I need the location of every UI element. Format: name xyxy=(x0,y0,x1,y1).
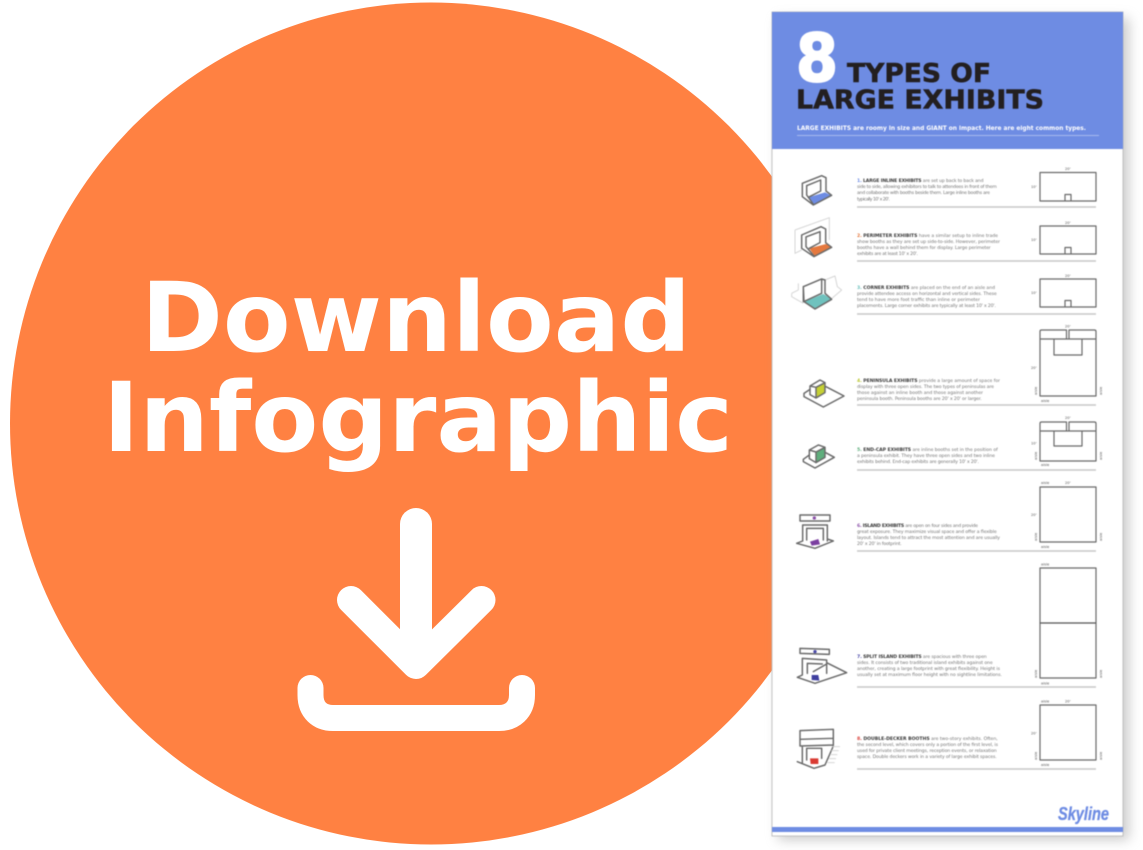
infographic poster xyxy=(772,12,1123,836)
exhibit type 7: split island xyxy=(797,562,1103,687)
icon: large inline booth xyxy=(802,176,832,205)
exhibit type 1: large inline xyxy=(802,167,1096,207)
exhibit type 5: end-cap xyxy=(803,416,1103,470)
icon: perimeter booth xyxy=(795,218,832,257)
exhibit type 5: end-cap: a peninsula exhibit. They have three open sides and two inline xyxy=(857,453,995,459)
floor plan: corner: 10' xyxy=(1031,291,1037,295)
text: double decker: 8. DOUBLE-DECKER BOOTHS are two-story exhibits. Often, xyxy=(857,736,998,742)
exhibit type 6: island: layout. Islands tend to attract the most attention and are usually xyxy=(857,535,1000,541)
exhibit type 4: peninsula: peninsula booth. Peninsula booths are 20' x 20' or larger. xyxy=(857,396,982,402)
floor plan: peninsula: aisle xyxy=(1034,386,1038,395)
floor plan: double decker: aisle xyxy=(1034,751,1038,760)
floor plan: end-cap xyxy=(1031,416,1103,467)
floor plan: split island: aisle xyxy=(1034,669,1038,678)
exhibit type 8: double decker: space. Double deckers work in a variety of large exhibit spaces. xyxy=(857,754,997,760)
exhibit type 2: perimeter: booths have a wall behind them for display. Large perimeter xyxy=(857,245,991,251)
floor plan: end-cap: 20' xyxy=(1065,416,1071,420)
floor plan: end-cap: 10' xyxy=(1031,442,1037,446)
exhibit type 6: island xyxy=(797,481,1103,551)
exhibit type 1: large inline: typically 10' x 20'. xyxy=(857,196,890,202)
poster header xyxy=(772,12,1123,149)
icon: corner booth xyxy=(792,276,842,309)
icon: split island booth xyxy=(797,648,847,683)
floor plan: island: 20' xyxy=(1065,481,1071,485)
exhibit type 2: perimeter xyxy=(795,218,1096,261)
floor plan: perimeter: 10' xyxy=(1031,238,1037,242)
poster shadow xyxy=(778,18,1129,840)
floor plan: island: aisle xyxy=(1034,532,1038,541)
floor plan: peninsula: aisle xyxy=(1099,386,1103,395)
exhibit type 7: split island: another, creating a large footprint with great flexibility. Height is xyxy=(857,666,1001,672)
exhibit type 1: large inline: side to side, allowing exhibitors to talk to attendees in front of them xyxy=(857,184,997,190)
floor plan: peninsula: aisle xyxy=(1041,399,1050,403)
logo: Skyline: Skyline xyxy=(1058,803,1109,824)
floor plan: split island: aisle xyxy=(1099,669,1103,678)
poster footer band xyxy=(772,827,1123,832)
exhibit type 2: perimeter: show booths as they are set up side-to-side. However, perimeter xyxy=(857,239,1000,245)
exhibit type 3: corner: tend to have more foot traffic than inline or perimeter xyxy=(857,297,980,303)
floor plan: end-cap: aisle xyxy=(1041,463,1050,467)
exhibit type 3: corner: provide attendee access on horizontal and vertical sides. These xyxy=(857,291,997,297)
floor plan: end-cap: aisle xyxy=(1099,451,1103,460)
text: large inline: 1. LARGE INLINE EXHIBITS are set up back to back and xyxy=(857,178,984,184)
floor plan: island: aisle xyxy=(1041,481,1050,485)
floor plan: large inline: 20' xyxy=(1065,167,1071,171)
floor plan: large inline xyxy=(1031,167,1096,201)
text: perimeter: 2. PERIMETER EXHIBITS have a similar setup to inline trade xyxy=(857,233,998,239)
exhibit type 7: split island: sides. It consists of two traditional island exhibits against one xyxy=(857,660,993,666)
exhibit type 1: large inline: and collaborate with booths beside them. Large inline booths are xyxy=(857,190,990,196)
exhibit type 8: double decker xyxy=(797,700,1103,769)
exhibit type 6: island: 20' x 20' in footprint. xyxy=(857,541,902,547)
exhibit type 4: peninsula xyxy=(804,324,1103,407)
poster title: TYPES OF xyxy=(847,59,991,89)
icon: end-cap booth xyxy=(803,445,834,468)
floor plan: corner: 20' xyxy=(1065,274,1071,278)
floor plan: island: aisle xyxy=(1099,532,1103,541)
floor plan: double decker: aisle xyxy=(1041,700,1050,704)
floor plan: perimeter: 20' xyxy=(1065,221,1071,225)
floor plan: peninsula xyxy=(1031,324,1103,403)
exhibit type 7: split island: usually set at maximum floor height with no sightline limitations. xyxy=(857,672,1002,678)
text: peninsula: 4. PENINSULA EXHIBITS provide a large amount of space for xyxy=(857,378,1000,384)
floor plan: island: aisle xyxy=(1041,545,1050,549)
exhibit type 3: corner xyxy=(792,274,1096,314)
poster title xyxy=(796,20,1044,116)
floor plan: perimeter xyxy=(1031,221,1096,254)
floor plan: double decker: 20' xyxy=(1065,700,1071,704)
floor plan: island xyxy=(1031,481,1103,549)
floor plan: split island xyxy=(1034,562,1103,686)
floor plan: double decker: 20' xyxy=(1031,732,1037,736)
text: corner: 3. CORNER EXHIBITS are placed on the end of an aisle and xyxy=(857,285,995,291)
exhibit type 5: end-cap: exhibits behind. End-cap exhibits are generally 10' x 20'. xyxy=(857,459,979,465)
icon: island booth xyxy=(797,515,833,548)
text: end-cap: 5. END-CAP EXHIBITS are inline booths set in the position of xyxy=(857,447,998,453)
floor plan: split island: aisle xyxy=(1041,682,1050,686)
floor plan: end-cap: aisle xyxy=(1034,451,1038,460)
exhibit type 8: double decker: used for private client meetings, reception events, or relaxation xyxy=(857,748,997,754)
floor plan: double decker: aisle xyxy=(1099,751,1103,760)
icon: peninsula booth xyxy=(804,380,844,407)
poster title: LARGE EXHIBITS xyxy=(796,86,1044,116)
floor plan: split island: aisle xyxy=(1041,562,1050,566)
floor plan: peninsula: 20' xyxy=(1031,366,1037,370)
floor plan: corner xyxy=(1031,274,1096,307)
floor plan: double decker xyxy=(1031,700,1103,767)
heading: Download Infographic: Download xyxy=(141,262,691,374)
poster subtitle: LARGE EXHIBITS are roomy in size and GIANT on impact. Here are eight common types. xyxy=(797,126,1086,132)
poster title: 8 xyxy=(796,20,838,97)
icon: double-decker booth xyxy=(797,729,840,768)
floor plan: peninsula: 20' xyxy=(1065,324,1071,328)
exhibit type 8: double decker: the second level, which covers only a portion of the first level, is xyxy=(857,742,999,748)
exhibit type 2: perimeter: exhibits are at least 10' x 20'. xyxy=(857,251,918,257)
exhibit type 6: island: great exposure. They maximize visual space and offer a flexible xyxy=(857,529,997,535)
icon: download arrow and tray xyxy=(310,524,522,718)
text: island: 6. ISLAND EXHIBITS are open on four sides and provide xyxy=(857,523,978,529)
heading: Download Infographic xyxy=(103,262,733,474)
floor plan: island: 20' xyxy=(1031,513,1037,517)
exhibit type 4: peninsula: display with three open sides. The two types of peninsulas are xyxy=(857,384,994,390)
floor plan: large inline: 10' xyxy=(1031,185,1037,189)
exhibit type 4: peninsula: those against an inline booth and those against another xyxy=(857,390,983,396)
orange download circle xyxy=(10,2,852,844)
text: split island: 7. SPLIT ISLAND EXHIBITS are spacious with three open xyxy=(857,654,987,660)
heading: Download Infographic: Infographic xyxy=(103,362,733,474)
exhibit type 3: corner: placements. Large corner exhibits are typically at least 10' x 20'. xyxy=(857,303,996,309)
floor plan: double decker: aisle xyxy=(1041,763,1050,767)
